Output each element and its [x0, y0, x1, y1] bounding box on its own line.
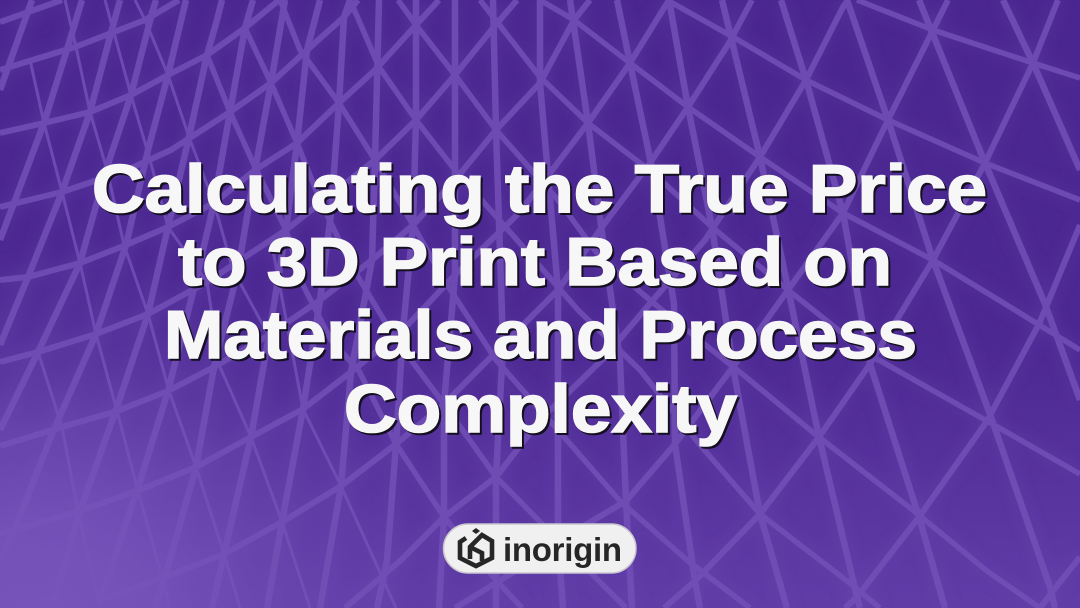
- title: Calculating the True Price: [92, 151, 987, 227]
- logo wordmark: inorigin: [503, 531, 622, 568]
- logo badge: [444, 524, 636, 573]
- icon: inorigin cube: [460, 528, 492, 566]
- title: to 3D Print Based on: [178, 224, 892, 300]
- title: [92, 151, 987, 447]
- title: Materials and Process: [164, 297, 917, 373]
- bottom light wash: [0, 330, 1080, 608]
- title: Complexity: [344, 371, 737, 447]
